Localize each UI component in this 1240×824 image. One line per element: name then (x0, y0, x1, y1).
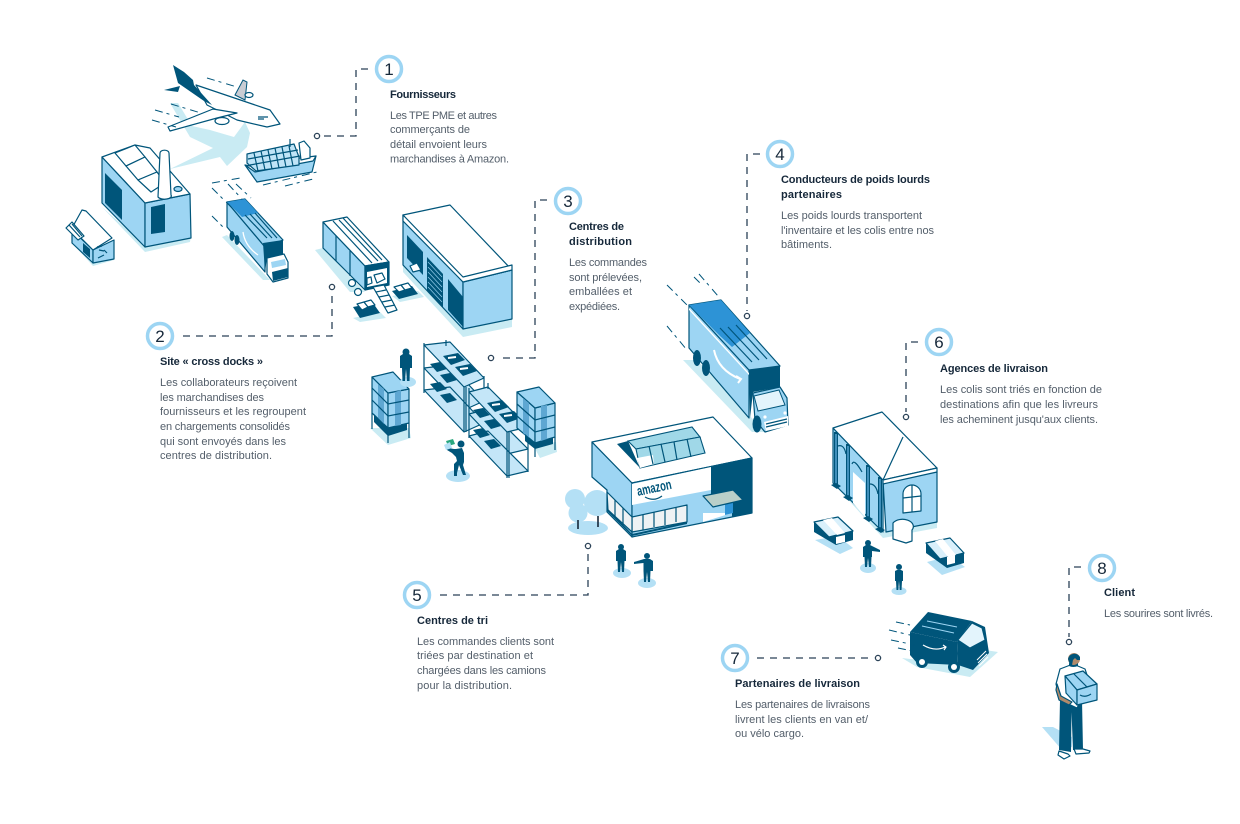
connector 4 (744, 154, 760, 319)
station building (831, 412, 937, 543)
step 1: Les TPE PME et autres (390, 110, 498, 122)
illustration: linehaul truck (667, 274, 788, 432)
step 8 (1090, 556, 1213, 620)
step 6: 6 (934, 333, 944, 352)
step 1: Fournisseurs (390, 89, 456, 101)
step 7: livrent les clients en van et/ (735, 714, 869, 726)
step 5: 5 (412, 586, 422, 605)
step 2: en chargements consolidés (160, 421, 290, 433)
package (1065, 671, 1097, 705)
step 2: qui sont envoyés dans les (160, 436, 286, 448)
step 4: Conducteurs de poids lourds (781, 174, 930, 186)
step 3: sont prélevées, (569, 272, 642, 284)
step 2: Site « cross docks » (160, 356, 263, 368)
step 2: fournisseurs et les regroupent (160, 406, 306, 418)
step 8: 8 (1097, 559, 1107, 578)
step 4: l'inventaire et les colis entre nos (781, 225, 934, 237)
step 3: expédiées. (569, 301, 620, 313)
step 1: 1 (384, 60, 394, 79)
storage pod (370, 372, 411, 445)
illustration: cross dock (trailer, pallets, building) (315, 205, 512, 337)
icon: cargo ship (212, 139, 321, 186)
step 3 (556, 188, 648, 313)
connector 7 (757, 655, 881, 661)
step 3: Les commandes (569, 257, 648, 269)
shelf unit (469, 383, 528, 478)
illustration: customer (1042, 653, 1097, 759)
truck shadow (683, 360, 765, 432)
step 1 (376, 56, 509, 166)
pallet (392, 283, 424, 302)
shop (66, 210, 114, 266)
truck trailer (667, 274, 780, 418)
step 7: Partenaires de livraison (735, 678, 860, 690)
step 4: 4 (775, 145, 785, 164)
step 8: Les sourires sont livrés. (1104, 608, 1213, 620)
worker (400, 348, 416, 387)
connector 5 (440, 543, 591, 595)
person (1056, 653, 1097, 759)
connector 2 (183, 284, 335, 336)
truck (212, 184, 288, 282)
package (926, 538, 965, 575)
step 1: commerçants de (390, 124, 470, 136)
connector 6 (903, 342, 918, 420)
step 4: Les poids lourds transportent (781, 210, 922, 222)
step 6: destinations afin que les livreurs (940, 399, 1098, 411)
logo: amazon: amazon (635, 476, 673, 499)
step 5: Centres de tri (417, 615, 488, 627)
step 7 (722, 646, 870, 740)
step 5 (404, 582, 554, 692)
truck cab (752, 387, 788, 432)
shelf unit (424, 340, 484, 432)
step 3: Centres de (569, 221, 624, 233)
van body (889, 612, 989, 673)
worker with box (444, 439, 470, 482)
step 6: Les colis sont triés en fonction de (940, 384, 1102, 396)
illustration: sorting centre (565, 417, 752, 588)
storage pod (517, 387, 557, 458)
ramp (373, 285, 397, 313)
step 2: Les collaborateurs reçoivent (160, 377, 297, 389)
step 3: emballées et (569, 286, 632, 298)
trailer (315, 217, 389, 296)
workers (613, 544, 656, 588)
step 2 (148, 324, 306, 462)
step 6: Agences de livraison (940, 363, 1048, 375)
pallet (353, 300, 386, 322)
illustration: delivery van (889, 612, 998, 677)
step 4 (768, 142, 934, 251)
step 2: centres de distribution. (160, 450, 272, 462)
step 2: les marchandises des (160, 392, 264, 404)
illustration: fulfilment centre (shelves, pods, workers) (370, 340, 557, 482)
package (814, 517, 853, 554)
step 2: 2 (155, 327, 165, 346)
warehouse building (403, 205, 512, 337)
customer shadow (1042, 727, 1072, 750)
connector 3 (488, 200, 547, 361)
step 4: bâtiments. (781, 239, 832, 251)
plane shadow (170, 103, 250, 169)
step 6 (926, 330, 1102, 426)
step 4: partenaires (781, 189, 842, 201)
step 1: détail envoient leurs (390, 139, 488, 151)
step 7: 7 (730, 649, 740, 668)
amazon building (592, 417, 752, 537)
step 3: 3 (563, 192, 573, 211)
workers (860, 540, 906, 595)
connector 8 (1066, 567, 1081, 645)
step 5: triées par destination et (417, 650, 533, 662)
step 8: Client (1104, 587, 1135, 599)
step 5: pour la distribution. (417, 680, 512, 692)
van shadow (902, 650, 998, 677)
illustration: delivery station (814, 412, 965, 595)
icon: plane (152, 65, 280, 131)
step 1: marchandises à Amazon. (390, 154, 509, 166)
step 5: Les commandes clients sont (417, 636, 554, 648)
step 7: ou vélo cargo. (735, 728, 804, 740)
step 6: les acheminent jusqu'aux clients. (940, 414, 1098, 426)
step 7: Les partenaires de livraisons (735, 699, 870, 711)
step 5: chargées dans les camions (417, 665, 546, 677)
logo: amazon (635, 476, 673, 499)
factory (102, 145, 191, 252)
connector 1 (314, 69, 368, 139)
step 3: distribution (569, 236, 632, 248)
trees (565, 489, 610, 535)
illustration: suppliers (plane, ship, factory, shop, truck) (66, 65, 321, 282)
